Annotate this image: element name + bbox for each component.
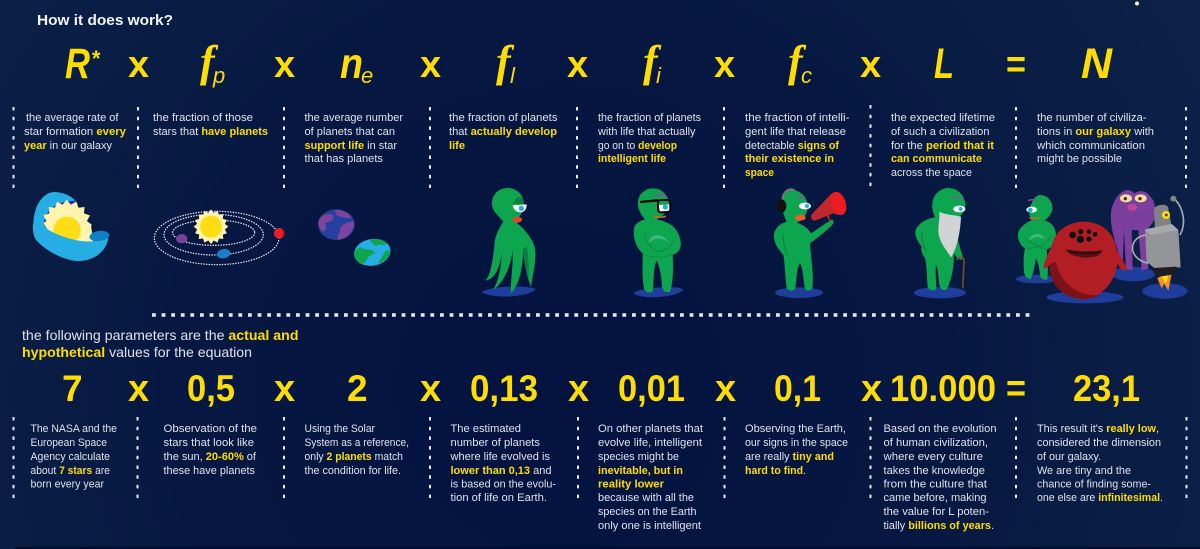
value note: 0,01: On other planets that	[598, 423, 703, 435]
icon: alien with megaphone	[774, 189, 849, 298]
value note: 10.000	[882, 423, 996, 532]
subheading: the following parameters are the actual and	[22, 327, 298, 343]
equation symbols: x	[860, 44, 881, 86]
description: ne: that has planets	[304, 153, 383, 165]
description: fc: the fraction of intelli-	[745, 112, 850, 124]
description: fi: with life that actually	[597, 126, 696, 138]
icon: two planets	[318, 209, 393, 269]
icon: solar system	[154, 209, 285, 265]
equation symbols: R	[65, 40, 90, 88]
value note: 0,01: only one is intelligent	[598, 520, 701, 532]
value note: 0,01	[598, 423, 703, 532]
value note: 23,1: We are tiny and the	[1037, 465, 1131, 477]
equation symbols: *	[91, 46, 101, 71]
value note: 0,1: Observing the Earth,	[745, 423, 846, 435]
equation symbols: l	[510, 63, 516, 88]
value note: 10.000: the value for L poten-	[884, 506, 989, 518]
value note: 23,1: of our galaxy.	[1037, 451, 1101, 463]
value note: 10.000: takes the knowledge	[884, 465, 985, 477]
value note: 7: Agency calculate	[30, 451, 110, 463]
equation values	[62, 368, 1140, 410]
equation symbols: f	[200, 37, 219, 86]
equation symbols: i	[656, 63, 662, 88]
value note: 0,13: is based on the evolu-	[450, 478, 556, 490]
description: fc: detectable signs of	[745, 140, 839, 152]
value note: 23,1: one else are infinitesimal.	[1037, 492, 1163, 504]
value note: 23,1: considered the dimension	[1037, 437, 1161, 449]
value note: 10.000: tially billions of years.	[884, 520, 994, 532]
equation symbols: f	[788, 37, 807, 86]
equation values: 2	[347, 368, 368, 409]
value note: 0,01: because with all the	[598, 492, 694, 504]
value note: 0,1: our signs in the space	[745, 437, 848, 449]
equation values: 10.000	[890, 368, 996, 409]
value note: 10.000: of human civilization,	[884, 437, 988, 449]
description: R*	[24, 112, 127, 152]
value note: 0,13: tion of life on Earth.	[450, 492, 547, 504]
description: ne: support life in star	[304, 140, 397, 152]
value note: 0,5	[164, 423, 257, 477]
description: fc: their existence in	[745, 153, 834, 165]
value note: 7: European Space	[30, 437, 107, 449]
equation values: 23,1	[1073, 368, 1140, 409]
description: L: of such a civilization	[891, 126, 990, 138]
value note: 7: born every year	[30, 478, 104, 490]
description: fl: that actually develop	[449, 126, 557, 138]
value note: 0,01: inevitable, but in	[598, 465, 683, 477]
value note: 2: Using the Solar	[304, 423, 375, 435]
value note: 7: The NASA and the	[30, 423, 117, 435]
description: fc: space	[745, 167, 774, 179]
equation symbols: x	[567, 44, 588, 86]
value note: 0,1: hard to find.	[745, 465, 806, 477]
equation values: 0,13	[470, 368, 538, 409]
value note: 2: only 2 planets match	[304, 451, 403, 463]
value note: 0,01: species might be	[598, 451, 679, 463]
equation symbols: f	[496, 37, 515, 86]
value note: 23,1: chance of finding some-	[1037, 478, 1151, 490]
value note: 0,5: these have planets	[164, 465, 255, 477]
value note: 10.000: Based on the evolution	[884, 423, 996, 435]
description: ne	[304, 112, 403, 165]
equation values: 0,01	[618, 368, 685, 409]
equation values: x	[128, 368, 149, 410]
description: fl	[449, 112, 558, 152]
equation symbols: x	[274, 44, 295, 86]
equation values: =	[1006, 368, 1026, 410]
description: fp: stars that have planets	[153, 126, 268, 138]
equation symbols: f	[643, 37, 662, 86]
description: R*: star formation every	[24, 126, 127, 138]
value note: 0,5: Observation of the	[164, 423, 257, 435]
description: R*: year in our galaxy	[24, 140, 112, 152]
description: L: can communicate	[891, 153, 982, 165]
value note: 2	[304, 423, 409, 477]
description: fp: the fraction of those	[153, 112, 253, 124]
value note: 0,13: number of planets	[450, 437, 540, 449]
value note: 10.000: from the culture that	[884, 478, 987, 490]
value note: 0,1	[745, 423, 848, 477]
value note: 0,01: species on the Earth	[598, 506, 696, 518]
description: fl: the fraction of planets	[449, 112, 558, 124]
value note: 0,5: the sun, 20-60% of	[164, 451, 257, 463]
value note: 0,5: stars that look like	[164, 437, 254, 449]
description: fl: life	[449, 140, 465, 152]
icon: star forming nest	[33, 192, 110, 261]
description: N: which communication	[1036, 140, 1145, 152]
description: ne: of planets that can	[304, 126, 395, 138]
description: fc: gent life that release	[745, 126, 846, 138]
equation symbols: c	[801, 63, 812, 88]
value note: 10.000: where every culture	[882, 451, 983, 463]
value note: 23,1	[1037, 423, 1163, 504]
equation symbols	[65, 37, 1113, 88]
equation symbols: =	[1006, 44, 1026, 86]
title: How it does work?	[37, 12, 173, 29]
icon: group of aliens	[1016, 190, 1188, 303]
icon: old alien with beard and cane	[914, 188, 966, 298]
description: N	[1036, 112, 1154, 165]
value note: 0,13: where life evolved is	[449, 451, 550, 463]
icon: octopus alien	[482, 188, 536, 297]
equation symbols: L	[934, 40, 954, 88]
value note: 0,13: lower than 0,13 and	[450, 465, 552, 477]
equation symbols: n	[340, 40, 363, 88]
value note: 0,1: are really tiny and	[745, 451, 834, 463]
description: L: the expected lifetime	[891, 112, 995, 124]
value note: 0,13: The estimated	[450, 423, 521, 435]
equation symbols: N	[1081, 40, 1113, 88]
equation values: x	[568, 368, 589, 410]
value note: 0,01: reality lower	[598, 478, 665, 490]
subheading: hypothetical values for the equation	[22, 344, 252, 360]
description: ne: the average number	[304, 112, 403, 124]
description: fp	[153, 112, 268, 138]
description: N: the number of civiliza-	[1037, 112, 1147, 124]
description: R*: the average rate of	[26, 112, 119, 124]
description: fi	[597, 112, 701, 165]
value note: 2: System as a reference,	[304, 437, 409, 449]
value note: 7	[30, 423, 117, 490]
value note: 0,13	[449, 423, 556, 504]
description: fi: go on to develop	[598, 140, 677, 152]
subheading	[22, 327, 298, 360]
equation symbols: x	[128, 44, 149, 86]
description: N: might be possible	[1037, 153, 1122, 165]
equation symbols: x	[714, 44, 735, 86]
equation values: x	[861, 368, 882, 410]
description: L: across the space	[891, 167, 972, 179]
equation values: x	[274, 368, 295, 410]
description: L: for the period that it	[891, 140, 994, 152]
value note: 0,01: evolve life, intelligent	[598, 437, 702, 449]
equation symbols: p	[212, 63, 225, 88]
description: L	[891, 112, 995, 179]
description: fi: the fraction of planets	[598, 112, 701, 124]
icon: alien with glasses	[633, 188, 683, 297]
equation values: x	[420, 368, 441, 410]
description: N: tions in our galaxy with	[1037, 126, 1154, 138]
value note: 23,1: This result it's really low,	[1037, 423, 1159, 435]
equation values: 0,5	[187, 368, 235, 409]
value note: 7: about 7 stars are	[30, 465, 110, 477]
equation symbols: e	[361, 63, 373, 88]
equation values: 0,1	[774, 368, 821, 409]
value note: 10.000: came before, making	[884, 492, 986, 504]
description: fi: intelligent life	[598, 153, 666, 165]
equation symbols: x	[420, 44, 441, 86]
value note: 2: the condition for life.	[304, 465, 401, 477]
equation values: x	[715, 368, 736, 410]
equation values: 7	[62, 368, 83, 409]
description: fc	[745, 112, 850, 179]
